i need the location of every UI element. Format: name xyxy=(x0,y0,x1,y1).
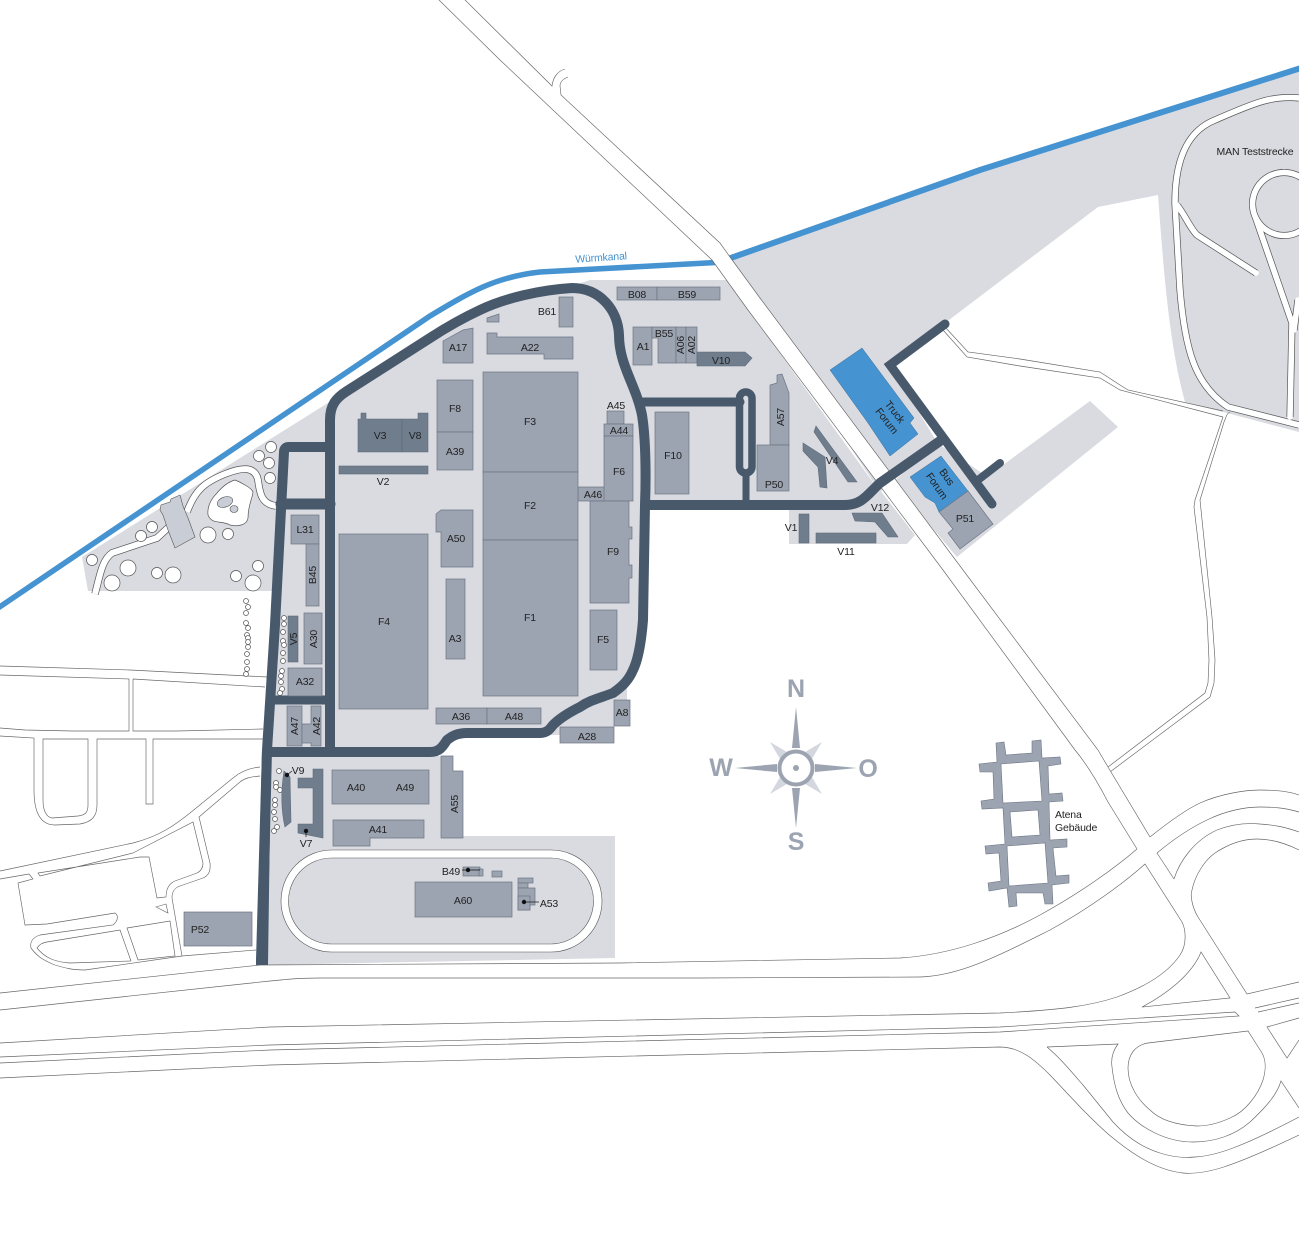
company roads xyxy=(256,288,1000,965)
building: A3 xyxy=(446,579,465,659)
building: B61: B61 xyxy=(538,306,556,318)
building: F6 xyxy=(604,436,633,501)
building: A45: A45 xyxy=(607,400,625,412)
canal: Würmkanal: Würmkanal xyxy=(575,250,627,266)
building: A50 xyxy=(436,510,473,567)
building: A41 xyxy=(333,820,424,846)
building: F6: F6 xyxy=(613,466,625,478)
building: A40 A49 xyxy=(332,770,429,804)
pond xyxy=(208,480,253,526)
building: A36 xyxy=(436,708,487,724)
building: A30 xyxy=(304,613,322,664)
building: B49 xyxy=(442,866,483,878)
building: A36: A36 xyxy=(452,711,470,723)
grey area: main campus xyxy=(82,280,880,965)
building: A42: A42 xyxy=(311,717,323,735)
building: A8 xyxy=(614,700,630,726)
building: A22 xyxy=(487,333,573,359)
building: A47: A47 xyxy=(289,717,301,735)
building: A47 xyxy=(287,706,302,746)
building: Truck Forum xyxy=(830,348,918,456)
building: Atena Gebäude: Atena xyxy=(1055,809,1082,821)
building: A48: A48 xyxy=(505,711,523,723)
building: B45 xyxy=(306,544,319,606)
grey area: V1 V11 V12 xyxy=(789,490,915,544)
main diagonal road xyxy=(437,0,1150,849)
building: V11 xyxy=(816,533,876,558)
building: V7 xyxy=(298,769,323,850)
small building xyxy=(487,314,499,322)
small trees xyxy=(244,598,286,834)
building: V4: V4 xyxy=(826,455,839,467)
building: A41: A41 xyxy=(369,824,387,836)
building: F1 xyxy=(483,540,578,696)
building: A55: A55 xyxy=(449,795,461,813)
building: A8: A8 xyxy=(616,707,629,719)
building: V2 xyxy=(339,466,428,488)
building: A39: A39 xyxy=(446,446,464,458)
building: P52: P52 xyxy=(191,924,209,936)
building: A17 xyxy=(443,328,473,363)
building: V8 xyxy=(402,413,428,452)
building: L31 xyxy=(291,515,319,544)
building: A02 xyxy=(686,327,698,363)
compass rose: W xyxy=(709,754,733,782)
grey area: bus forum xyxy=(893,401,1118,557)
building: Bus Forum: Bus xyxy=(936,467,956,488)
building: V8: V8 xyxy=(409,430,422,442)
oval track xyxy=(281,850,602,952)
building: Atena Gebäude xyxy=(979,740,1097,907)
building: P51 xyxy=(939,491,993,549)
building: A46: A46 xyxy=(584,489,602,501)
building: A06: A06 xyxy=(675,336,687,354)
building: V10 xyxy=(697,352,752,367)
building: V3 xyxy=(358,413,402,452)
canal: Würmkanal xyxy=(0,68,1299,608)
building: Truck Forum: Truck xyxy=(882,399,907,426)
building: V5 xyxy=(288,616,300,662)
building: V11: V11 xyxy=(837,546,855,558)
park building xyxy=(160,495,195,548)
building: B61 xyxy=(538,297,573,327)
compass rose: O xyxy=(858,755,878,783)
road network: highway xyxy=(0,790,1299,1173)
building: A42 xyxy=(302,706,323,746)
building: V9 xyxy=(282,765,305,827)
building: A32 xyxy=(288,668,322,696)
building: P50 xyxy=(757,445,789,491)
building: B55: B55 xyxy=(655,328,673,340)
building: A44: A44 xyxy=(610,425,628,437)
building: A32: A32 xyxy=(296,676,314,688)
building: A06 xyxy=(675,327,687,363)
building: A50: A50 xyxy=(447,533,465,545)
pond islands xyxy=(216,495,238,512)
building: V12 xyxy=(852,502,898,537)
building: A28: A28 xyxy=(578,731,596,743)
building: A1: A1 xyxy=(637,341,650,353)
building: V4 xyxy=(803,426,857,488)
building: F10: F10 xyxy=(664,450,682,462)
building: V5: V5 xyxy=(288,632,300,645)
building: B59 xyxy=(657,287,720,301)
building: B49: B49 xyxy=(442,866,460,878)
building: Truck Forum: Forum xyxy=(873,406,900,437)
small building near B49 xyxy=(492,871,502,877)
building: F5 xyxy=(590,610,617,670)
building: A39 xyxy=(437,432,473,470)
building: A17: A17 xyxy=(449,342,467,354)
building: P50: P50 xyxy=(765,479,783,491)
building: A40 A49: A40 xyxy=(347,782,365,794)
grey area: north-east and test track xyxy=(725,68,1299,492)
building: B45: B45 xyxy=(307,566,319,584)
label: MAN Teststrecke: MAN Teststrecke xyxy=(1217,146,1294,158)
building: B08: B08 xyxy=(628,289,646,301)
building: B08 xyxy=(617,287,657,301)
building: P52 xyxy=(184,912,252,946)
building: F3 xyxy=(483,372,578,472)
building: P51: P51 xyxy=(956,513,974,525)
building: A53: A53 xyxy=(540,898,558,910)
building: A28 xyxy=(560,727,614,743)
building: V3: V3 xyxy=(374,430,387,442)
building: A3: A3 xyxy=(449,633,462,645)
building: F2: F2 xyxy=(524,500,536,512)
building: F8: F8 xyxy=(449,403,461,415)
building: V9: V9 xyxy=(292,765,305,777)
building: A1 xyxy=(633,327,652,365)
building: V2: V2 xyxy=(377,476,390,488)
building: B59: B59 xyxy=(678,289,696,301)
building: A46 xyxy=(578,487,605,501)
building: A44 xyxy=(604,424,633,437)
building: A57: A57 xyxy=(775,408,787,426)
building: A48 xyxy=(487,708,541,724)
building: L31: L31 xyxy=(296,524,314,536)
building: V10: V10 xyxy=(712,355,730,367)
building: A60: A60 xyxy=(454,895,472,907)
building: Bus Forum xyxy=(910,456,968,512)
building: F4 xyxy=(339,534,428,709)
building: Atena Gebäude: Gebäude xyxy=(1055,822,1097,834)
trees xyxy=(86,442,276,591)
road network: west side xyxy=(0,666,267,970)
building: B55 xyxy=(652,327,676,363)
test track roads xyxy=(1175,97,1299,425)
building: A02: A02 xyxy=(686,336,698,354)
compass rose: N xyxy=(787,675,805,703)
building: A45 xyxy=(607,400,625,424)
road network: east connector xyxy=(943,327,1230,772)
building: F2 xyxy=(483,472,578,540)
compass rose: S xyxy=(788,828,804,856)
building: F1: F1 xyxy=(524,612,536,624)
building: A57 xyxy=(770,374,789,445)
building: V1 xyxy=(785,514,809,543)
buildings xyxy=(184,287,1097,946)
building: F5: F5 xyxy=(597,634,609,646)
building: F4: F4 xyxy=(378,616,390,628)
building: A30: A30 xyxy=(308,630,320,648)
park: paths, pond and trees xyxy=(86,442,276,594)
building: V1: V1 xyxy=(785,522,798,534)
building: F3: F3 xyxy=(524,416,536,428)
building: A40 A49: A49 xyxy=(396,782,414,794)
building: A60 xyxy=(415,882,512,917)
building: V7: V7 xyxy=(300,838,313,850)
compass rose xyxy=(709,675,878,856)
building: F10 xyxy=(655,412,689,494)
building: A22: A22 xyxy=(521,342,539,354)
building: A53 xyxy=(518,878,558,910)
building: F9 xyxy=(590,501,632,603)
building: A55 xyxy=(441,756,463,838)
building: F9: F9 xyxy=(607,546,619,558)
building: V12: V12 xyxy=(871,502,889,514)
building: F8 xyxy=(437,380,473,432)
building: Bus Forum: Forum xyxy=(923,471,950,502)
